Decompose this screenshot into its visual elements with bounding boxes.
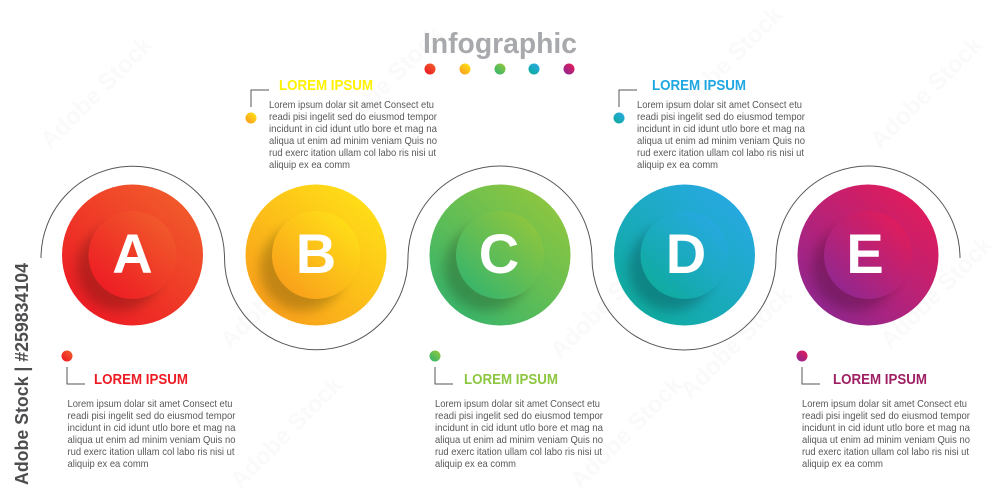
watermark: Adobe Stock [675, 281, 798, 404]
watermark: Adobe Stock [325, 21, 448, 144]
circle D: D [666, 222, 706, 285]
circle C [430, 184, 570, 326]
wavy connector line [41, 166, 960, 350]
circle E: E [846, 222, 884, 285]
watermark: Adobe Stock [545, 241, 668, 364]
callout C: readi pisi ingelit sed do eiusmod tempor [435, 410, 603, 422]
callout C: incidunt in cid idunt utlo bore et mag na [435, 422, 603, 434]
callout E [796, 350, 970, 470]
callout D [614, 78, 805, 171]
callout C: rud exerc itation ullam col labo ris nisi ut [435, 446, 602, 458]
callout C [430, 350, 603, 470]
watermark: Adobe Stock [565, 371, 688, 494]
callout D: Lorem ipsum dolar sit amet Consect etu [637, 99, 802, 111]
callout D: readi pisi ingelit sed do eiusmod tempor [637, 111, 805, 123]
callout A: LOREM IPSUM [94, 372, 188, 388]
callout E: readi pisi ingelit sed do eiusmod tempor [802, 410, 970, 422]
callout B: aliqua ut enim ad minim veniam Quis no [269, 135, 437, 147]
callout D: rud exerc itation ullam col labo ris nisi ut [637, 147, 804, 159]
callout E: LOREM IPSUM [833, 372, 927, 388]
watermark: Adobe Stock [215, 231, 338, 354]
callout D: aliquip ex ea comm [637, 159, 718, 171]
callout D: incidunt in cid idunt utlo bore et mag na [637, 123, 805, 135]
callout B [246, 78, 437, 171]
callout E: rud exerc itation ullam col labo ris nisi ut [802, 446, 969, 458]
callout A: readi pisi ingelit sed do eiusmod tempor [68, 410, 236, 422]
callout B: incidunt in cid idunt utlo bore et mag na [269, 123, 437, 135]
callout D: LOREM IPSUM [652, 78, 746, 94]
callout D: aliqua ut enim ad minim veniam Quis no [637, 135, 805, 147]
callout C: Lorem ipsum dolar sit amet Consect etu [435, 398, 600, 410]
callout A: aliquip ex ea comm [68, 458, 149, 470]
stock id side label: Adobe Stock | #259834104 [12, 263, 32, 485]
circle A: A [112, 222, 153, 285]
callout A: aliqua ut enim ad minim veniam Quis no [68, 434, 236, 446]
callout A: incidunt in cid idunt utlo bore et mag na [68, 422, 236, 434]
callout C: LOREM IPSUM [464, 372, 558, 388]
watermark: Adobe Stock [35, 31, 158, 154]
callout A: rud exerc itation ullam col labo ris nisi ut [68, 446, 235, 458]
circle D [614, 184, 755, 326]
callout C: aliquip ex ea comm [435, 458, 516, 470]
callout B: rud exerc itation ullam col labo ris nisi ut [269, 147, 436, 159]
callout B: LOREM IPSUM [279, 78, 373, 94]
callout A: Lorem ipsum dolar sit amet Consect etu [68, 398, 233, 410]
callout B: aliquip ex ea comm [269, 159, 350, 171]
callout B: readi pisi ingelit sed do eiusmod tempor [269, 111, 437, 123]
watermark: Adobe Stock [875, 231, 998, 354]
circle B [246, 184, 386, 326]
callout B: Lorem ipsum dolar sit amet Consect etu [269, 99, 434, 111]
title: Infographic [423, 28, 577, 60]
watermark: Adobe Stock [225, 371, 348, 494]
circle C: C [479, 222, 519, 285]
watermark: Adobe Stock [665, 1, 788, 124]
callout E: incidunt in cid idunt utlo bore et mag na [802, 422, 970, 434]
callout E: aliquip ex ea comm [802, 458, 883, 470]
circle A [62, 184, 203, 326]
callout C: aliqua ut enim ad minim veniam Quis no [435, 434, 603, 446]
title colour dots [424, 64, 574, 74]
circle B: B [296, 222, 336, 285]
callout E: aliqua ut enim ad minim veniam Quis no [802, 434, 970, 446]
callout A [62, 350, 236, 470]
callout E: Lorem ipsum dolar sit amet Consect etu [802, 398, 967, 410]
watermark: Adobe Stock [865, 31, 988, 154]
circle E [798, 184, 938, 326]
